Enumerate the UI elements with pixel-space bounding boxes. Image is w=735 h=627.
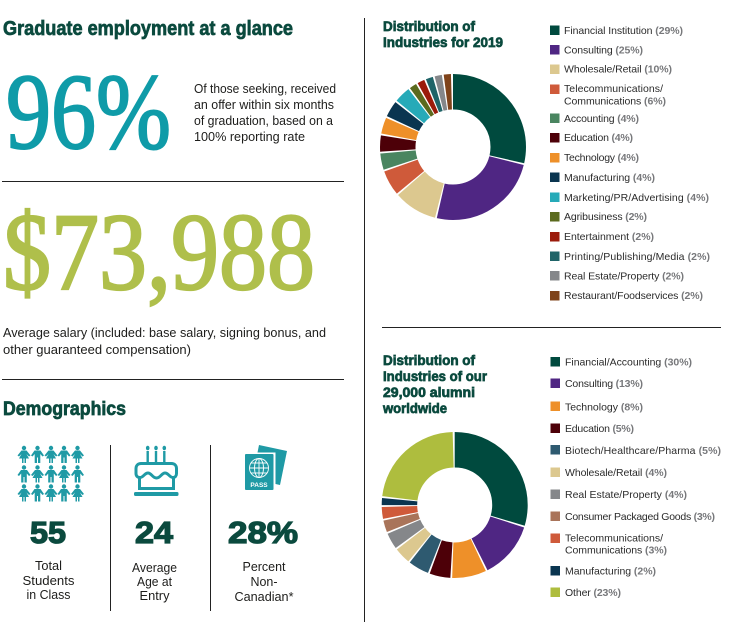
legend: alumni industries: Biotech/Healthcare/Pharma (5%) — [565, 445, 721, 457]
label: percent non-Canadian: Percent — [242, 560, 286, 574]
label: average age: Average — [132, 561, 177, 575]
label: total students: Total — [35, 559, 62, 573]
heading: distribution alumni: worldwide — [382, 401, 447, 416]
big stat: average salary: $73,988 — [3, 191, 315, 313]
label: total students — [22, 559, 74, 602]
legend: industries 2019: Telecommunications/ — [564, 83, 663, 95]
label: total students: Students — [22, 574, 74, 588]
legend: industries 2019: Marketing/PR/Advertising (4%) — [564, 192, 709, 204]
legend: industries 2019: Entertainment (2%) — [564, 231, 654, 243]
legend: industries 2019: Accounting (4%) — [564, 113, 639, 125]
legend: alumni industries: Telecommunications/ — [565, 532, 663, 544]
heading: distribution 2019: Distribution of — [383, 19, 476, 34]
legend: alumni industries: Communications (3%) — [565, 544, 667, 556]
legend: alumni industries — [550, 356, 721, 599]
legend: alumni industries: Consulting (13%) — [565, 378, 643, 390]
legend: alumni industries: Real Estate/Property (4%) — [565, 489, 687, 501]
heading: distribution alumni: Distribution of — [383, 353, 476, 368]
legend: alumni industries: Other (23%) — [565, 587, 621, 599]
icon: birthday cake — [134, 446, 178, 496]
number: total students: 55 — [30, 515, 66, 550]
label: average age: Age at — [137, 575, 173, 589]
heading: distribution 2019: Industries for 2019 — [383, 35, 503, 50]
legend: alumni industries: Wholesale/Retail (4%) — [565, 467, 667, 479]
legend: industries 2019 — [550, 25, 710, 302]
heading: distribution alumni — [382, 353, 488, 416]
legend: alumni industries: Manufacturing (2%) — [565, 566, 656, 578]
label: average age: Entry — [140, 589, 170, 603]
legend: industries 2019: Real Estate/Property (2%) — [564, 270, 684, 282]
donut chart: alumni industries — [399, 450, 510, 560]
number: average age: 24 — [135, 515, 174, 550]
salary description — [3, 326, 326, 357]
label: percent non-Canadian: Canadian* — [234, 590, 294, 604]
legend: industries 2019: Communications (6%) — [564, 96, 666, 108]
label: total students: in Class — [26, 588, 70, 602]
legend: industries 2019: Financial Institution (29%) — [564, 25, 683, 37]
legend: alumni industries: Technology (8%) — [565, 402, 643, 414]
legend: industries 2019: Technology (4%) — [564, 152, 639, 164]
legend: industries 2019: Wholesale/Retail (10%) — [564, 64, 672, 76]
heading: distribution alumni: Industries of our — [383, 369, 488, 384]
offer rate description: an offer within six months — [194, 98, 334, 112]
icon: passport: PASS — [250, 482, 268, 489]
title: Graduate employment at a glance — [3, 18, 293, 40]
salary description: other guaranteed compensation) — [3, 343, 191, 357]
label: percent non-Canadian: Non- — [250, 575, 278, 589]
icon: passport — [245, 445, 287, 490]
legend: alumni industries: Consumer Packaged Goods (3%) — [565, 511, 715, 523]
label: average age — [132, 561, 177, 603]
legend: industries 2019: Restaurant/Foodservices (2%) — [564, 290, 703, 302]
legend: industries 2019: Printing/Publishing/Media (2%) — [564, 251, 710, 263]
offer rate description — [194, 82, 336, 144]
legend: alumni industries: Financial/Accounting (30%) — [565, 356, 692, 368]
big stat: 96%: 96% — [6, 53, 171, 172]
salary description: Average salary (included: base salary, signing bonus, and — [3, 326, 326, 340]
number: percent non-Canadian: 28% — [228, 515, 298, 550]
heading: distribution alumni: 29,000 alumni — [383, 385, 475, 400]
heading: distribution 2019 — [383, 19, 503, 50]
legend: industries 2019: Education (4%) — [564, 132, 633, 144]
donut chart: industries 2019 — [398, 92, 508, 202]
offer rate description: of graduation, based on a — [194, 114, 333, 128]
legend: industries 2019: Manufacturing (4%) — [564, 172, 655, 184]
icon: students — [18, 446, 84, 502]
label: percent non-Canadian — [234, 560, 294, 604]
legend: industries 2019: Agribusiness (2%) — [564, 211, 647, 223]
offer rate description: Of those seeking, received — [194, 82, 336, 96]
heading: demographics: Demographics — [3, 399, 126, 420]
legend: alumni industries: Education (5%) — [565, 423, 634, 435]
legend: industries 2019: Consulting (25%) — [564, 44, 643, 56]
offer rate description: 100% reporting rate — [194, 130, 305, 144]
